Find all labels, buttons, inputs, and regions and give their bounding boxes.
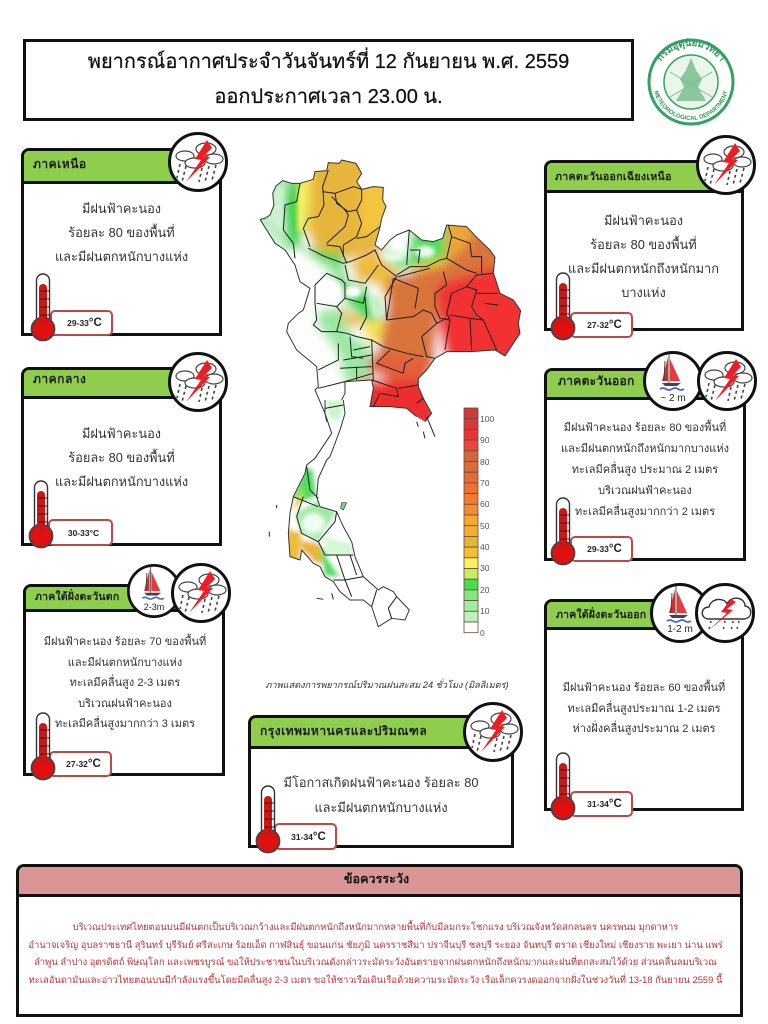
heading: central: ภาคกลาง — [33, 372, 86, 386]
map: north, central and east regions — [260, 160, 522, 422]
icon: boat with wave height — [643, 351, 700, 411]
text: west coast forecast: ทะเลมีคลื่นสูง 2-3 เมตร — [70, 677, 180, 689]
legend: rainfall colour scale: 100 — [480, 414, 494, 424]
icon: thunderstorm with cloud — [695, 583, 755, 643]
panel: north — [21, 132, 228, 342]
panel: west coast south — [23, 563, 231, 780]
text: east forecast: ทะเลมีคลื่นสูงมากกว่า 2 เมตร — [575, 506, 715, 518]
icon: boat with wave height: ~ 2 m — [660, 393, 686, 404]
text: Bangkok forecast: มีโอกาสเกิดฝนฟ้าคะนอง ร้อยละ 80 — [284, 775, 478, 790]
warning text: อำนาจเจริญ อุบลราชธานี สุรินทร์ บุรีรัมย์ ศรีสะเกษ ร้อยเอ็ด กาฬสินธุ์ ขอนแก่น ชัยภูมิ นครราชสีมา ปราจีนบุรี ชลบุรี ระยอง จันทบุรี ตราด เชียงใหม่ เชียงราย พะเยา น่าน แพร่ — [28, 939, 723, 950]
legend: rainfall colour scale: 50 — [480, 521, 490, 531]
heading: north: ภาคเหนือ — [33, 157, 87, 171]
text: central forecast: ร้อยละ 80 ของพื้นที่ — [68, 450, 175, 465]
text: northeast forecast: ร้อยละ 80 ของพื้นที่ — [590, 237, 697, 252]
panel: warning — [16, 864, 743, 1017]
panel: central — [21, 352, 228, 548]
legend: rainfall colour scale: 40 — [480, 542, 490, 552]
warning text — [28, 920, 723, 986]
panel: east — [544, 351, 757, 566]
temperature box: 27-32°C — [587, 319, 622, 331]
text: central forecast: มีฝนฟ้าคะนอง — [82, 426, 161, 441]
text: east forecast: มีฝนฟ้าคะนอง ร้อยละ 80 ของพื้นที่ — [564, 422, 726, 434]
heading: east: ภาคตะวันออก — [558, 374, 635, 388]
title: ออกประกาศเวลา 23.00 น. — [214, 86, 443, 108]
text: east coast forecast: ห่างฝั่งคลื่นสูงประมาณ 2 เมตร — [572, 723, 716, 735]
temperature box: 29-33°C — [587, 543, 622, 555]
text: Bangkok forecast: และมีฝนตกหนักบางแห่ง — [314, 800, 448, 815]
panel: Bangkok and vicinity — [248, 702, 523, 854]
text: northeast forecast: และมีฝนตกหนักถึงหนักมาก — [568, 261, 719, 276]
icon: thermometer — [28, 480, 54, 548]
legend: rainfall colour scale — [464, 408, 494, 638]
temperature box — [570, 536, 633, 562]
text: east forecast: และมีฝนตกหนักถึงหนักมากบางแห่ง — [561, 443, 729, 455]
temperature box: 30-33°C — [68, 528, 99, 538]
legend: rainfall colour scale: 90 — [480, 435, 490, 445]
legend: rainfall colour scale: 70 — [480, 478, 490, 488]
icon: meteorological department logo: กรมอุตุนิยมวิทยา — [658, 38, 724, 62]
text: east forecast: บริเวณฝนฟ้าคะนอง — [598, 485, 692, 497]
map: southern peninsula — [267, 393, 435, 633]
legend: rainfall colour scale: 0 — [480, 628, 485, 638]
text: east coast forecast: มีฝนฟ้าคะนอง ร้อยละ 60 ของพื้นที่ — [563, 682, 725, 694]
icon: thermometer — [550, 272, 576, 340]
icon: thermometer — [550, 752, 576, 820]
panel: northeast — [544, 135, 756, 340]
warning heading: ข้อควรระวัง — [344, 872, 409, 886]
heading: northeast: ภาคตะวันออกเฉียงเหนือ — [555, 171, 672, 183]
text: west coast forecast — [44, 634, 206, 730]
rainfall map — [260, 160, 522, 628]
temperature box: 31-34°C — [587, 798, 622, 810]
text: west coast forecast: ทะเลมีคลื่นสูงมากกว่า 3 เมตร — [55, 718, 195, 730]
temperature box — [570, 791, 633, 817]
icon: thunderstorm — [168, 352, 228, 412]
temperature box: 29-33°C — [67, 317, 102, 329]
panel: east coast south — [544, 583, 755, 820]
text: west coast forecast: และมีฝนตกหนักบางแห่ง — [68, 656, 182, 668]
text: north forecast: มีฝนฟ้าคะนอง — [82, 201, 161, 216]
legend: rainfall colour scale: 60 — [480, 499, 490, 509]
icon: boat with wave height — [127, 564, 176, 618]
text: east forecast: ทะเลมีคลื่นสูง ประมาณ 2 เมตร — [572, 464, 718, 476]
title — [23, 39, 634, 121]
warning text: ทะเลอันดามันและอ่าวไทยตอนบนมีกำลังแรงขึ้นโดยมีคลื่นสูง 2-3 เมตร ขอให้ชาวเรือเดินเรือด้วยความระมัดระวัง เรือเล็กควรงดออกจากฝั่งในช่วงวันที่ 13-18 กันยายน 2559 นี้ — [29, 974, 722, 985]
icon: meteorological department logo — [648, 38, 734, 126]
temperature box — [570, 312, 633, 338]
icon: thunderstorm — [168, 132, 228, 192]
map caption: ภาพแสดงการพยากรณ์ปริมาณฝนสะสม 24 ชั่วโมง (มิลลิเมตร) — [265, 680, 509, 690]
legend: rainfall colour scale: 30 — [480, 563, 490, 573]
text: west coast forecast: มีฝนฟ้าคะนอง ร้อยละ 70 ของพื้นที่ — [44, 636, 206, 648]
legend: rainfall colour scale: 80 — [480, 457, 490, 467]
icon: boat with wave height — [650, 583, 702, 643]
temperature box — [50, 310, 113, 336]
peninsula borders — [269, 400, 435, 627]
text: north forecast: และมีฝนตกหนักบางแห่ง — [55, 249, 188, 264]
temperature box: 31-34°C — [291, 831, 326, 843]
icon: thunderstorm — [696, 135, 756, 195]
icon: boat with wave height: 1-2 m — [667, 624, 693, 635]
text: north forecast — [55, 201, 188, 264]
icon: thermometer — [256, 785, 280, 854]
icon: thermometer — [30, 273, 56, 342]
icon: thermometer — [30, 712, 56, 780]
icon: thermometer — [550, 497, 576, 566]
heading: Bangkok: กรุงเทพมหานครและปริมณฑล — [260, 724, 427, 738]
legend: rainfall colour scale: 10 — [480, 606, 490, 616]
text: central forecast — [55, 426, 188, 489]
icon: thunderstorm — [171, 563, 231, 623]
text: east coast forecast: ทะเลมีคลื่นสูงประมาณ 1-2 เมตร — [567, 702, 721, 714]
legend: rainfall colour scale: 20 — [480, 585, 490, 595]
text: east coast forecast — [563, 680, 725, 735]
warning text: ลำพูน ลำปาง อุตรดิตถ์ พิษณุโลก และเพชรบูรณ์ ขอให้ประชาชนในบริเวณดังกล่าวระมัดระวังอันตรายจากฝนตกหนักถึงหนักมากและฝนที่ตกสะสมไว้ด้วย ส่วนคลื่นลมบริเวณ — [34, 956, 717, 967]
icon: thunderstorm — [697, 351, 757, 411]
icon: meteorological department logo: METEOROLOGICAL DEPARTMENT — [654, 90, 728, 120]
text: northeast forecast: มีฝนฟ้าคะนอง — [604, 213, 683, 228]
temperature box — [48, 519, 113, 546]
warning heading — [19, 867, 740, 897]
text: central forecast: และมีฝนตกหนักบางแห่ง — [55, 474, 188, 489]
icon: boat with wave height: 2-3m — [144, 602, 164, 612]
temperature box — [274, 823, 337, 850]
warning text: บริเวณประเทศไทยตอนบนมีฝนตกเป็นบริเวณกว้างและมีฝนตกหนักถึงหนักมากหลายพื้นที่กับมีลมกระโชกแรง บริเวณจังหวัดสกลนคร นครพนม มุกดาหาร — [73, 921, 678, 932]
temperature box — [49, 751, 112, 777]
text: west coast forecast: บริเวณฝนฟ้าคะนอง — [78, 698, 172, 710]
text: Bangkok forecast — [284, 775, 478, 815]
text: east forecast — [561, 420, 729, 518]
heading: east coast south: ภาคใต้ฝั่งตะวันออก — [556, 609, 646, 621]
text: northeast forecast — [568, 213, 719, 300]
temperature box: 27-32°C — [66, 758, 101, 770]
country and province borders — [260, 160, 521, 422]
heading: west coast south: ภาคใต้ฝั่งตะวันตก — [35, 591, 119, 603]
text: north forecast: ร้อยละ 80 ของพื้นที่ — [68, 225, 175, 240]
icon: thunderstorm — [463, 702, 523, 762]
title: พยากรณ์อากาศประจำวันจันทร์ที่ 12 กันยายน พ.ศ. 2559 — [88, 51, 569, 73]
text: northeast forecast: บางแห่ง — [621, 285, 666, 300]
